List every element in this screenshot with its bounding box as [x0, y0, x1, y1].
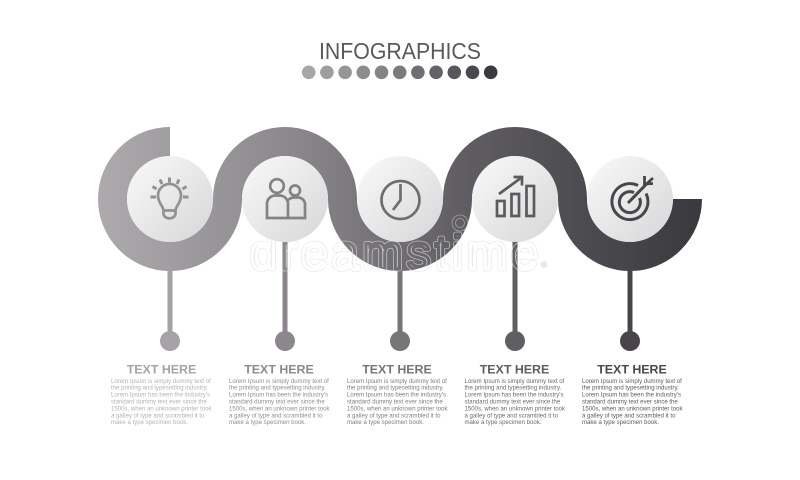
step 3 heading: TEXT HERE: [362, 362, 432, 376]
icon: people: [267, 179, 305, 218]
step 4 text: Lorem Ipsum is simply dummy text of: [464, 379, 565, 385]
step 5 text: make a type specimen book.: [582, 420, 659, 426]
step 3 text: a galley of type and scrambled it to: [347, 413, 441, 419]
step 5 text: Lorem Ipsum is simply dummy text of: [582, 379, 682, 385]
step 2 text: a galley of type and scrambled it to: [229, 413, 323, 419]
title: INFOGRAPHICS: [319, 38, 481, 64]
step 5 text: 1500s, when an unknown printer took: [582, 406, 683, 412]
stem and node 2: [275, 240, 295, 351]
icon: target with arrow: [612, 176, 653, 220]
step 1 text: the printing and typesetting industry.: [111, 386, 208, 392]
step 5 text: Lorem Ipsum has been the industry's: [582, 393, 681, 399]
step 4 text: make a type specimen book.: [464, 420, 542, 426]
step 2 text: make a type specimen book.: [229, 420, 306, 426]
step 3 text: Lorem Ipsum has been the industry's: [347, 393, 446, 399]
step 4 text: the printing and typesetting industry.: [464, 386, 562, 392]
step 1 text: make a type specimen book.: [111, 420, 188, 426]
step discs: [127, 156, 673, 242]
step 3 text: Lorem Ipsum is simply dummy text of: [347, 379, 447, 385]
step 3 text: standard dummy text ever since the: [347, 400, 443, 406]
icon: light bulb: [150, 178, 188, 218]
icon: bar chart with arrow: [497, 177, 534, 216]
step 2 text: standard dummy text ever since the: [229, 400, 325, 406]
step 5 text: the printing and typesetting industry.: [582, 386, 679, 392]
stem and node 5: [620, 240, 640, 351]
wave ribbon: [112, 141, 687, 256]
watermark: [240, 215, 548, 275]
step 3 text: 1500s, when an unknown printer took: [347, 406, 448, 412]
step 5 text: standard dummy text ever since the: [582, 400, 678, 406]
stem and node 1: [160, 240, 180, 351]
stem and node 3: [390, 240, 410, 351]
step 3 text: the printing and typesetting industry.: [347, 386, 444, 392]
step 3 text: make a type specimen book.: [347, 420, 424, 426]
progress dots: [302, 66, 498, 79]
step 1 text: Lorem Ipsum is simply dummy text of: [111, 379, 211, 385]
step 2 heading: TEXT HERE: [244, 362, 314, 376]
step 4 text: standard dummy text ever since the: [464, 400, 561, 406]
stem and node 4: [505, 240, 525, 351]
step 4 text: Lorem Ipsum has been the industry's: [464, 393, 563, 399]
step 2 text: 1500s, when an unknown printer took: [229, 406, 330, 412]
step 4 text: 1500s, when an unknown printer took: [464, 406, 566, 412]
icon: clock: [382, 181, 420, 219]
step 4 text: a galley of type and scrambled it to: [464, 413, 559, 419]
step 1 text: Lorem Ipsum has been the industry's: [111, 393, 210, 399]
step 2 text: Lorem Ipsum is simply dummy text of: [229, 379, 329, 385]
step 1 text: a galley of type and scrambled it to: [111, 413, 205, 419]
step 2 text: the printing and typesetting industry.: [229, 386, 326, 392]
step 1 heading: TEXT HERE: [127, 362, 196, 376]
step 2 text: Lorem Ipsum has been the industry's: [229, 393, 328, 399]
step 5 heading: TEXT HERE: [597, 362, 667, 376]
step 5 text: a galley of type and scrambled it to: [582, 413, 676, 419]
step 4 heading: TEXT HERE: [480, 362, 549, 376]
step 1 text: standard dummy text ever since the: [111, 400, 207, 406]
step 1 text: 1500s, when an unknown printer took: [111, 406, 212, 412]
